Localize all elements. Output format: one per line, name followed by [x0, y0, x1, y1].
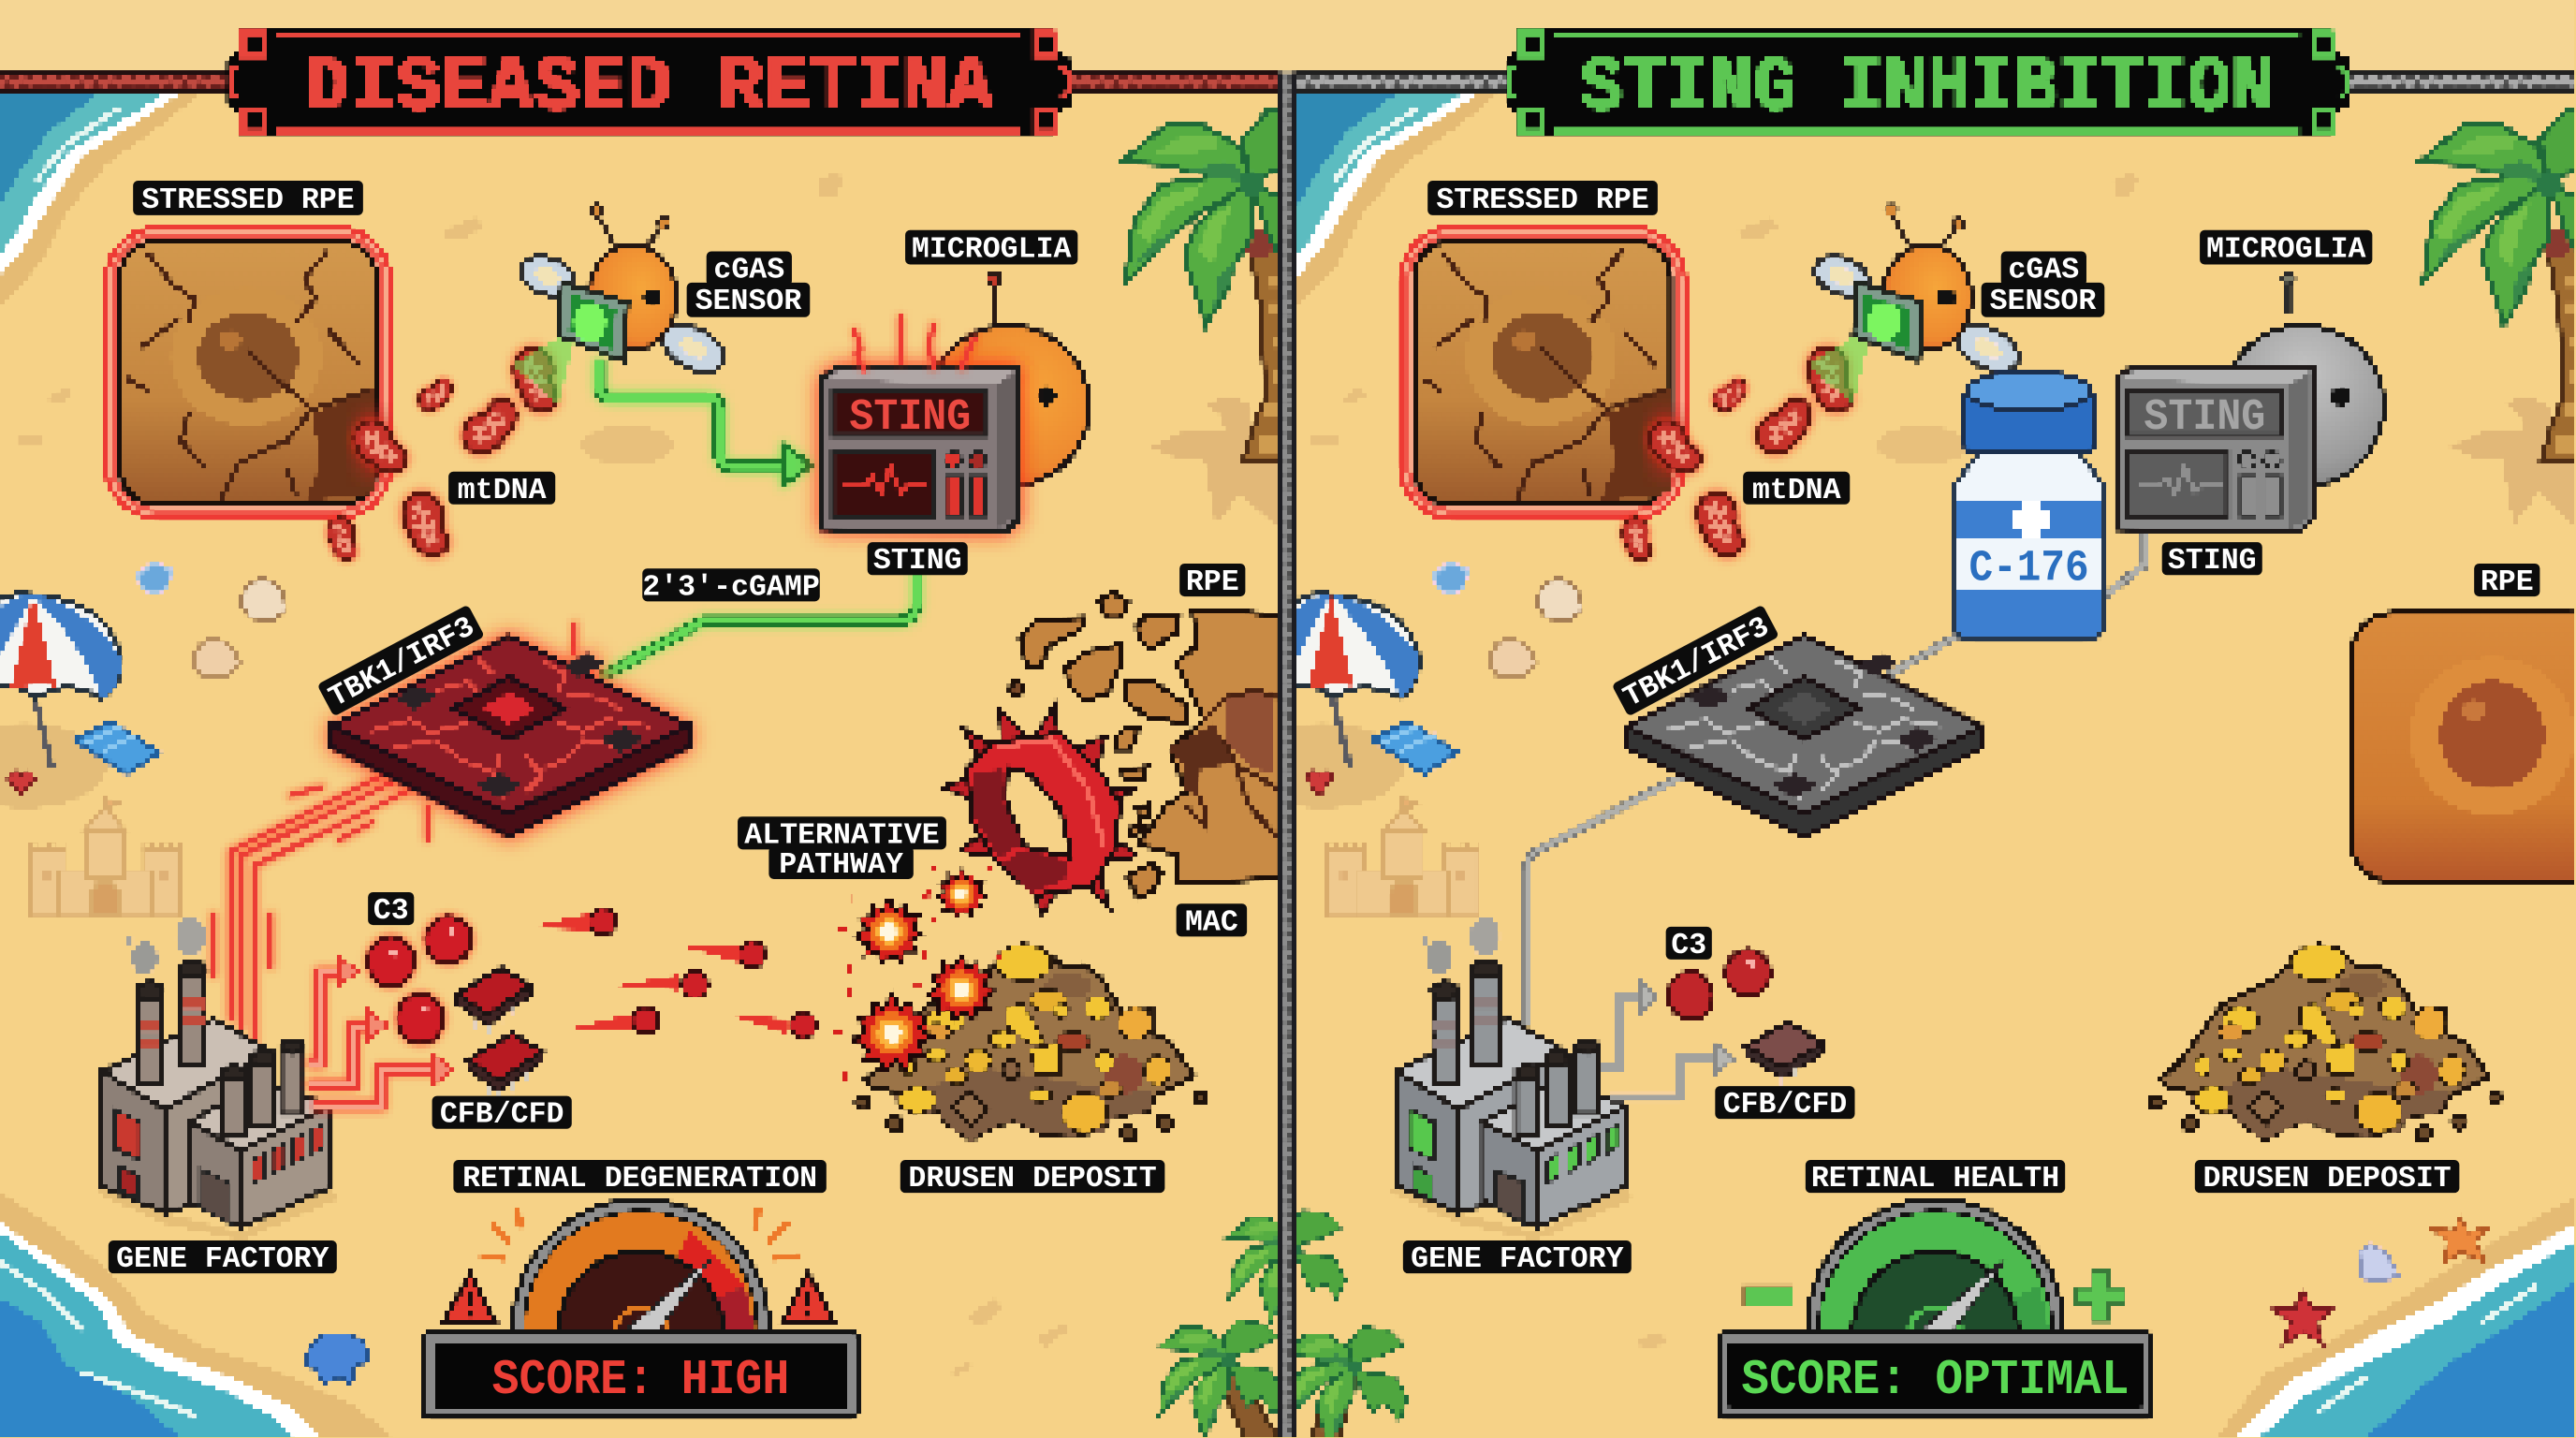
rpe: healthy [2351, 613, 2576, 882]
flames around gauge [479, 1208, 800, 1258]
palm shadow [1151, 396, 1278, 529]
drusen deposit pile [2150, 945, 2501, 1141]
chip: tbk1/irf3 gray [1627, 636, 1983, 836]
shells [138, 562, 285, 677]
arrow: cgas to sting [600, 359, 812, 486]
title: sting inhibition: STING INHIBITION [1580, 44, 2275, 132]
bottle text: c-176: C-176 [1969, 545, 2089, 594]
arrow: sting to tbk1 [601, 566, 916, 677]
label: gene factory right: GENE FACTORY [1411, 1243, 1624, 1276]
palm shadow [2450, 396, 2576, 529]
header border strip: right [1298, 72, 2576, 94]
label: rpe right: RPE [2481, 566, 2534, 599]
label: mac [1177, 903, 1247, 939]
label: drusen deposit right: DRUSEN DEPOSIT [2203, 1163, 2452, 1196]
palm: bottom center [1226, 1211, 1346, 1322]
explosions [833, 865, 1002, 1081]
ocean: top [1298, 94, 1499, 307]
beach decor: starfish and shell [2274, 1216, 2491, 1344]
microglia: gray [2223, 273, 2384, 486]
label: rpe: RPE [1186, 566, 1239, 599]
mitochondria: mtdna [322, 342, 569, 565]
sand marks [17, 172, 1068, 1377]
label: cgas sensor: SENSOR [695, 286, 801, 318]
label: sting: STING [873, 545, 962, 578]
label: cgas sensor [687, 252, 810, 318]
arrows: factory to c3 and cfb [307, 973, 435, 1106]
gauge: retinal health [1808, 1199, 2063, 1341]
drusen deposit pile [856, 945, 1207, 1141]
arrowheads [339, 956, 453, 1086]
label: cgas sensor right [1982, 252, 2104, 318]
mitochondria: mtdna [1617, 342, 1864, 565]
arrows: chip to factory [213, 621, 575, 1049]
umbrella and towel [1240, 594, 1457, 808]
sparks: overheating [855, 315, 976, 372]
label: cfb/cfd right: CFB/CFD [1723, 1089, 1847, 1122]
label: c3: C3 [373, 895, 409, 928]
chip: tbk1/irf3 [332, 636, 688, 836]
label: drusen deposit: DRUSEN DEPOSIT [908, 1163, 1157, 1196]
sand castle [30, 799, 181, 917]
cfb chips [457, 968, 542, 1101]
rpe fragments [1010, 592, 1186, 899]
score text: optimal: SCORE: OPTIMAL [1741, 1352, 2130, 1408]
screen text: sting left: STING [849, 393, 971, 443]
projectiles [526, 909, 816, 1038]
bee: cgas sensor [1808, 205, 2027, 404]
label: cgas sensor right: cGAS [2008, 255, 2079, 287]
inhibited gray line [1526, 534, 2144, 1027]
label: cgas sensor right: SENSOR [1990, 286, 2096, 318]
label: alternative pathway [738, 816, 946, 882]
plus icon [2075, 1271, 2124, 1321]
label: cgas sensor: cGAS [713, 255, 784, 287]
palm: bottom left [1157, 1321, 1283, 1438]
gene factory: gray with green windows [1390, 917, 1633, 1240]
label: gene factory: GENE FACTORY [116, 1243, 329, 1276]
panel: sting inhibition [1226, 94, 2576, 1438]
label: microglia: MICROGLIA [912, 234, 1072, 267]
label: c3 right: C3 [1671, 930, 1706, 962]
score plaque [424, 1332, 857, 1418]
label: retinal health: RETINAL HEALTH [1811, 1163, 2059, 1196]
label: tbk1/irf3 right: TBK1/IRF3 [1618, 611, 1775, 715]
label: retinal degeneration: RETINAL DEGENERATION [462, 1163, 817, 1196]
score plaque [1719, 1332, 2152, 1418]
center divider [1278, 72, 1298, 1438]
label: alternative pathway: PATHWAY [779, 849, 903, 882]
ocean: top left [0, 94, 200, 307]
c3 balls: reduced [1668, 949, 1770, 1020]
label: alternative pathway: ALTERNATIVE [744, 819, 940, 852]
title: diseased retina [227, 26, 1071, 138]
umbrella and towel [0, 594, 159, 808]
score text: high: SCORE: HIGH [492, 1352, 789, 1408]
sting machine [822, 366, 1018, 533]
palm: bottom [1281, 1328, 1408, 1438]
palm: top [1120, 111, 1351, 460]
ocean: bottom right [2217, 1196, 2576, 1438]
label: 2'3'-cgamp: 2'3'-cGAMP [642, 571, 820, 604]
label: tbk1/irf3: TBK1/IRF3 [324, 611, 480, 715]
cfb chip: reduced [1747, 1022, 1823, 1086]
microglia [929, 272, 1090, 486]
gauge: retinal degeneration [513, 1199, 768, 1341]
gene factory [95, 917, 339, 1240]
icon: blue sea critter [305, 1334, 368, 1384]
warning triangles [444, 1273, 835, 1323]
bottle: c-176 [1954, 372, 2104, 640]
label: mtdna: mtDNA [458, 475, 547, 507]
label: stressed rpe right: STRESSED RPE [1436, 184, 1649, 217]
mac ring [943, 705, 1137, 916]
minus icon [1745, 1286, 1793, 1306]
stressed rpe cell [105, 227, 391, 520]
sand marks [1311, 172, 2139, 1351]
palm: bottom center [1226, 1211, 1346, 1322]
c3 balls [368, 917, 472, 1043]
title: diseased retina: DISEASED RETINA [304, 44, 994, 132]
sting machine: gray [2116, 366, 2313, 533]
shells [1434, 562, 1582, 677]
label: stressed rpe: STRESSED RPE [141, 184, 355, 217]
ocean: bottom left [0, 1191, 394, 1438]
label: sting right: STING [2168, 545, 2257, 578]
bee: cgas sensor [513, 205, 732, 404]
label: mtdna right: mtDNA [1752, 475, 1841, 507]
rpe: destroyed [1138, 609, 1278, 882]
label: mac: MAC [1185, 906, 1238, 939]
panel: diseased retina [0, 94, 1351, 1438]
arrows: factory to c3 and cfb [1600, 981, 1734, 1097]
title: sting inhibition [1505, 26, 2349, 138]
stressed rpe cell [1399, 227, 1686, 520]
label: microglia right: MICROGLIA [2206, 234, 2366, 267]
header border strip: left [0, 72, 1278, 94]
screen text: sting right: STING [2144, 393, 2265, 443]
palm: top [2419, 111, 2576, 460]
label: cfb/cfd: CFB/CFD [440, 1099, 564, 1132]
sand castle [1327, 799, 1479, 917]
